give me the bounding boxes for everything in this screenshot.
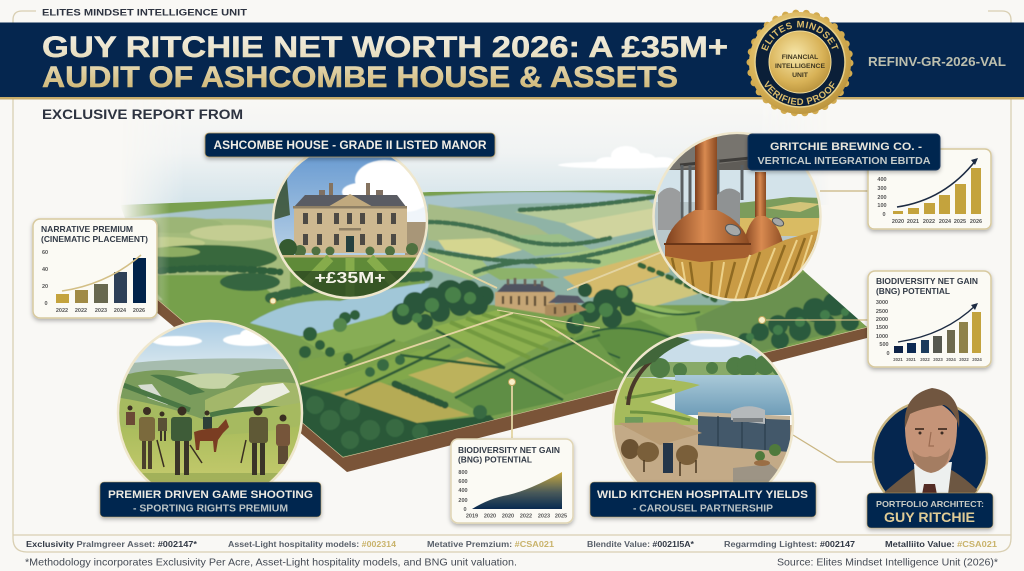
- seal: [746, 10, 854, 116]
- label: Gritchie Brewing: GRITCHIE BREWING CO. -: [770, 141, 922, 153]
- axis labels: 0: [463, 507, 467, 513]
- year labels: 2021: [893, 357, 903, 362]
- seal centre text: UNIT: [792, 72, 809, 79]
- year labels: 2024: [946, 357, 956, 362]
- trend arrow: [897, 160, 976, 207]
- chart title: NARRATIVE PREMIUM: [41, 224, 133, 234]
- year labels: [893, 357, 982, 362]
- axis labels: 200: [877, 195, 887, 201]
- arrow head: [971, 158, 978, 165]
- label: Gritchie Brewing: VERTICAL INTEGRATION EBITDA: [758, 156, 930, 167]
- chart title: [458, 445, 560, 464]
- axis labels: 2000: [876, 317, 888, 323]
- strip item: Blendite Value: #0021I5A*: [587, 539, 695, 549]
- label: game shooting: PREMIER DRIVEN GAME SHOOTING: [108, 489, 313, 501]
- year labels: 2025: [954, 219, 966, 225]
- manor on the map: [495, 278, 587, 317]
- sky: [134, 147, 688, 204]
- year labels: 2023: [95, 308, 107, 314]
- axis labels: 600: [458, 479, 468, 485]
- data strip: [26, 539, 997, 549]
- axis labels: 100: [877, 203, 887, 209]
- axis labels: 200: [458, 498, 468, 504]
- year labels: 2020: [892, 219, 904, 225]
- year labels: 2022: [959, 357, 969, 362]
- label: game shooting: [100, 482, 321, 517]
- chart title: (CINEMATIC PLACEMENT): [41, 234, 148, 244]
- unit heading: ELITES MINDSET INTELLIGENCE UNIT: [42, 8, 247, 18]
- strip item: Asset-Light hospitality models: #002314: [228, 539, 396, 549]
- label: game shooting: - SPORTING RIGHTS PREMIUM: [133, 504, 288, 514]
- seal ring text: ELITES MINDSET: [761, 20, 839, 51]
- vignette ring: [118, 321, 302, 505]
- label: wild kitchen: WILD KITCHEN HOSPITALITY YIELDS: [597, 489, 808, 501]
- year labels: [466, 514, 567, 520]
- vignette ring: [273, 144, 427, 298]
- year labels: 2020: [484, 514, 496, 520]
- axis labels: [42, 250, 48, 307]
- year labels: 2022: [920, 357, 930, 362]
- axis labels: 400: [877, 177, 887, 183]
- year labels: 2020: [502, 514, 514, 520]
- axis labels: 400: [458, 488, 468, 494]
- axis labels: 0: [882, 212, 886, 218]
- trend arrow: [898, 305, 976, 342]
- axis labels: 40: [42, 267, 48, 273]
- bars: [893, 168, 981, 214]
- map markers: [270, 298, 766, 386]
- chart: narrative premium: [33, 219, 157, 318]
- year labels: 2019: [466, 514, 478, 520]
- axis labels: [877, 177, 887, 218]
- source note: Source: Elites Mindset Intelligence Unit (2026)*: [777, 556, 998, 568]
- axis labels: 0: [44, 301, 48, 307]
- label: Gritchie Brewing: [748, 134, 940, 170]
- panel: Ashcombe House: [272, 157, 428, 300]
- year labels: 2024: [972, 357, 982, 362]
- seal centre text: [775, 54, 825, 79]
- arrow head: [971, 303, 978, 310]
- seal ring lower text: VERIFIED PROOF: [764, 80, 834, 105]
- strip item: Exclusivity Pralmgreer Asset: #002147*: [26, 539, 198, 549]
- title: GUY RITCHIE NET WORTH 2026: A £35M+: [42, 31, 728, 64]
- axis labels: 60: [42, 250, 48, 256]
- bars: [56, 258, 146, 303]
- year labels: [892, 219, 982, 225]
- year labels: 2022: [520, 514, 532, 520]
- year labels: 2021: [907, 219, 919, 225]
- year labels: 2024: [114, 308, 127, 314]
- year labels: 2026: [970, 219, 982, 225]
- terrain surface: [110, 185, 880, 470]
- year labels: 2022: [923, 219, 935, 225]
- panel: wild kitchen vignette: [612, 330, 794, 482]
- axis labels: 800: [458, 470, 468, 476]
- year labels: 2022: [75, 308, 87, 314]
- block side: [155, 297, 867, 472]
- value overlay: +£35M+: [314, 270, 386, 287]
- chart title: [41, 224, 148, 244]
- chart title: (BNG) POTENTIAL: [876, 286, 950, 296]
- year labels: [56, 308, 145, 314]
- title: [42, 31, 728, 94]
- label: Ashcombe House: [205, 133, 495, 157]
- year labels: 2024: [939, 219, 952, 225]
- strip item: Metative Premzium: #CSA021: [427, 539, 554, 549]
- label: portfolio architect: PORTFOLIO ARCHITECT:: [876, 499, 984, 509]
- shooting party: [126, 406, 290, 475]
- year labels: 2023: [538, 514, 550, 520]
- vignette ring: [654, 133, 820, 300]
- title: AUDIT OF ASHCOMBE HOUSE & ASSETS: [42, 61, 678, 94]
- landscape map: [122, 146, 872, 472]
- strip item: Regarmding Lightest: #002147: [724, 539, 855, 549]
- strip item: Metalliito Value: #CSA021: [885, 539, 997, 549]
- axis labels: 0: [886, 351, 890, 357]
- axis labels: 2500: [876, 309, 888, 315]
- bars: [894, 312, 981, 353]
- header band: [0, 22, 1024, 100]
- manor vignette: [274, 157, 426, 297]
- axis labels: [876, 300, 890, 357]
- year labels: 2021: [906, 357, 916, 362]
- chart: biodiversity net gain, bars: [868, 271, 991, 367]
- report strapline: EXCLUSIVE REPORT FROM: [42, 107, 243, 122]
- year labels: 2022: [56, 308, 68, 314]
- axis labels: 300: [877, 186, 887, 192]
- year labels: 2025: [555, 514, 567, 520]
- chart title: BIODIVERSITY NET GAIN: [876, 276, 978, 286]
- seal centre text: FINANCIAL: [782, 54, 818, 61]
- axis labels: 1500: [876, 325, 888, 331]
- connector lines: [300, 191, 872, 462]
- cloud: [558, 146, 682, 168]
- chart title: BIODIVERSITY NET GAIN: [458, 445, 560, 455]
- axis labels: 500: [879, 342, 889, 348]
- chart title: (BNG) POTENTIAL: [458, 454, 532, 464]
- axis labels: 1000: [876, 334, 888, 340]
- area series: [472, 472, 562, 509]
- trend line: [62, 255, 141, 291]
- block edge highlight: [155, 297, 867, 457]
- axis labels: [458, 470, 468, 513]
- chart title: [876, 276, 978, 296]
- portrait: Guy Ritchie: [872, 388, 988, 493]
- label: Ashcombe House: ASHCOMBE HOUSE - GRADE II LISTED MANOR: [214, 140, 487, 152]
- label: wild kitchen: - CAROUSEL PARTNERSHIP: [633, 504, 773, 514]
- label: wild kitchen: [590, 482, 816, 517]
- vignette ring: [613, 332, 793, 512]
- seal centre text: INTELLIGENCE: [775, 63, 825, 70]
- year labels: 2023: [933, 357, 943, 362]
- chart: brewery EBITDA: [868, 149, 991, 229]
- reference code: REFINV-GR-2026-VAL: [868, 55, 1006, 69]
- panel: brewery vignette: [650, 130, 830, 305]
- axis labels: 20: [42, 284, 48, 290]
- axis labels: 3000: [876, 300, 888, 306]
- label: portfolio architect: GUY RITCHIE: [884, 510, 975, 525]
- chart: biodiversity net gain, area: [451, 439, 573, 523]
- panel: game shooting vignette: [116, 320, 304, 482]
- label: portfolio architect: [867, 493, 993, 528]
- year labels: 2026: [133, 308, 145, 314]
- methodology footnote: *Methodology incorporates Exclusivity Per Acre, Asset-Light hospitality models, and BNG unit valuation.: [25, 556, 517, 568]
